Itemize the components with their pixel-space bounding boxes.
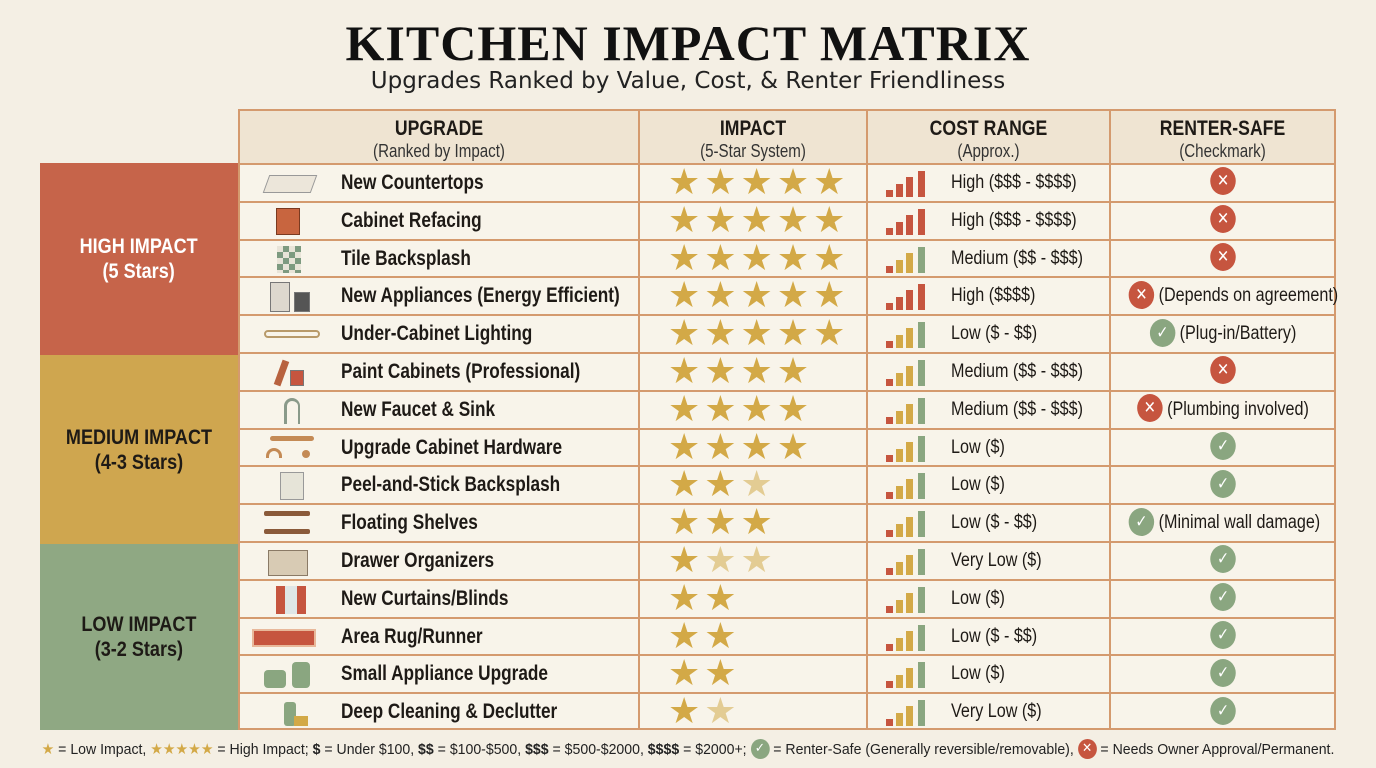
row: New Appliances: (Depends on agreement) [1159,285,1338,306]
row: Cabinet Refacing: High ($$$ - $$$$) [951,210,1077,231]
category: high impact: (5 Stars) [103,260,175,283]
header: impact: IMPACT [720,117,786,140]
row: Peel-and-Stick Backsplash: Low ($) [951,474,1005,495]
row: Cabinet Refacing [240,201,1334,239]
row: Cabinet Refacing: ✕ [1217,209,1229,229]
row: Floating Shelves: ✓ [1135,512,1147,532]
row: Upgrade Cabinet Hardware: ✓ [1217,436,1229,456]
row: Drawer Organizers: Drawer Organizers [341,549,494,572]
category: high impact: HIGH IMPACT [80,235,198,258]
icon: tiles [277,246,301,273]
header: cost: (Approx.) [957,141,1020,161]
row: Under-Cabinet Lighting: ✓ [1156,323,1168,343]
icon: cabinet [276,208,300,235]
row: Small Appliance Upgrade: ✓ [1217,663,1229,683]
row: New Faucet & Sink: (Plumbing involved) [1167,399,1309,420]
header: cost [868,111,1111,165]
row: New Countertops: High ($$$ - $$$$) [951,172,1077,193]
row: New Appliances: New Appliances (Energy Efficient) [341,284,620,307]
row: Cabinet Refacing: ★★★★★ [668,200,849,241]
row: Upgrade Cabinet Hardware: ★★★★ [668,427,813,468]
header: renter-safe: (Checkmark) [1179,141,1266,161]
row: Drawer Organizers: Very Low ($) [951,550,1042,571]
row: New Faucet & Sink [240,390,1334,428]
row: New Curtains/Blinds: ★★ [668,578,741,619]
icon: paint [274,360,304,386]
category: medium impact: (4-3 Stars) [95,450,183,474]
table [238,109,1336,730]
title: KITCHEN IMPACT MATRIX [346,15,1030,71]
icon: light strip [264,330,320,338]
cost bars [886,171,925,197]
header: renter-safe: RENTER-SAFE [1160,117,1285,140]
icon: toaster and kettle [264,662,310,688]
legend: ★ = Low Impact, ★★★★★ = High Impact; $ = Under $100, $$ = $100-$500, $$$ = $500-$2000, $$$$ = $2000+; = Renter-Safe (Generally reversible/removable), = Needs Owner Approval/Permanent. [42,740,1334,758]
row: New Faucet & Sink: ★★★★ [668,389,813,430]
row: Tile Backsplash: ✕ [1217,247,1229,267]
row: Area Rug/Runner: ✓ [1217,625,1229,645]
icon: shelves [264,511,310,534]
row: Under-Cabinet Lighting: ★★★★★ [668,313,849,354]
icon: appliances [270,282,310,312]
row: Small Appliance Upgrade: ★★ [668,653,741,694]
row: Tile Backsplash: Medium ($$ - $$$) [951,248,1083,269]
row: Paint Cabinets: ★★★★ [668,351,813,392]
header: upgrade: UPGRADE [395,117,483,140]
row: New Countertops: ★★★★★ [668,162,849,203]
category: high impact [40,163,238,355]
row: Area Rug/Runner: Low ($ - $$) [951,626,1037,647]
icon: cleaning [284,702,308,726]
header: cost: COST RANGE [930,117,1047,140]
row: Paint Cabinets: ✕ [1217,360,1229,380]
category: low impact: (3-2 Stars) [95,638,183,661]
row: Peel-and-Stick Backsplash [240,465,1334,503]
row: Deep Cleaning & Declutter: ★★ [668,691,741,732]
row: Paint Cabinets: Medium ($$ - $$$) [951,361,1083,382]
row: Small Appliance Upgrade: Low ($) [951,663,1005,684]
legend: ✓ [755,741,765,756]
row: Tile Backsplash: ★★★★★ [668,238,849,279]
category: medium impact [40,355,238,544]
row: Floating Shelves: Low ($ - $$) [951,512,1037,533]
icon: rug [252,629,316,647]
row: Peel-and-Stick Backsplash: Peel-and-Stick Backsplash [341,473,560,496]
row: Paint Cabinets: Paint Cabinets (Professional) [341,360,580,383]
row: Cabinet Refacing: Cabinet Refacing [341,209,482,232]
category: low impact: LOW IMPACT [81,613,197,636]
row: New Countertops [240,163,1334,201]
row: Small Appliance Upgrade: Small Appliance Upgrade [341,662,548,685]
row: Area Rug/Runner: ★★ [668,616,741,657]
subtitle: Upgrades Ranked by Value, Cost, & Renter Friendliness [371,68,1005,94]
row: New Faucet & Sink: ✕ [1144,398,1156,418]
legend: ✕ [1082,741,1092,756]
row: Under-Cabinet Lighting: Low ($ - $$) [951,323,1037,344]
row: New Curtains/Blinds: Low ($) [951,588,1005,609]
row: Deep Cleaning & Declutter [240,692,1334,730]
row: New Appliances: ★★★★★ [668,275,849,316]
row: New Faucet & Sink: Medium ($$ - $$$) [951,399,1083,420]
row: Under-Cabinet Lighting: (Plug-in/Battery) [1180,323,1296,344]
row: Tile Backsplash: Tile Backsplash [341,247,471,270]
icon: countertop [262,175,318,193]
row: Deep Cleaning & Declutter: ✓ [1217,701,1229,721]
row: Tile Backsplash [240,239,1334,277]
row: Drawer Organizers: ✓ [1217,549,1229,569]
row: Floating Shelves [240,503,1334,541]
header: impact [640,111,868,165]
row: New Curtains/Blinds: ✓ [1217,587,1229,607]
row: New Appliances [240,276,1334,314]
row: Floating Shelves: ★★★ [668,502,777,543]
row: Peel-and-Stick Backsplash: ★★★ [668,464,777,505]
row: New Faucet & Sink: New Faucet & Sink [341,398,495,421]
row: Upgrade Cabinet Hardware: Upgrade Cabinet Hardware [341,436,562,459]
icon: curtains [276,586,306,614]
row: New Curtains/Blinds [240,579,1334,617]
icon: sticker sheet [280,472,304,500]
row: New Curtains/Blinds: New Curtains/Blinds [341,587,508,610]
icon: faucet [284,398,300,424]
header: upgrade: (Ranked by Impact) [373,141,505,161]
row: Floating Shelves: Floating Shelves [341,511,478,534]
row: Area Rug/Runner [240,617,1334,655]
row: Drawer Organizers: ★★★ [668,540,777,581]
row: Paint Cabinets [240,352,1334,390]
category: low impact [40,544,238,730]
row: Small Appliance Upgrade [240,654,1334,692]
row: Area Rug/Runner: Area Rug/Runner [341,625,483,648]
row: Deep Cleaning & Declutter: Deep Cleaning & Declutter [341,700,557,723]
row: Peel-and-Stick Backsplash: ✓ [1217,474,1229,494]
row: Upgrade Cabinet Hardware: Low ($) [951,437,1005,458]
row: Under-Cabinet Lighting [240,314,1334,352]
header: impact: (5-Star System) [700,141,806,161]
header: renter-safe [1111,111,1334,165]
icon: drawer [268,550,308,576]
row: New Countertops: ✕ [1217,171,1229,191]
header: upgrade [240,111,640,165]
icon: hardware [266,436,314,458]
row: Deep Cleaning & Declutter: Very Low ($) [951,701,1042,722]
row: New Appliances: High ($$$$) [951,285,1035,306]
row: New Countertops: New Countertops [341,171,484,194]
row: Drawer Organizers [240,541,1334,579]
category: medium impact: MEDIUM IMPACT [66,426,212,448]
row: Under-Cabinet Lighting: Under-Cabinet Lighting [341,322,532,345]
row: Floating Shelves: (Minimal wall damage) [1159,512,1320,533]
row: Upgrade Cabinet Hardware [240,428,1334,466]
row: New Appliances: ✕ [1135,285,1147,305]
